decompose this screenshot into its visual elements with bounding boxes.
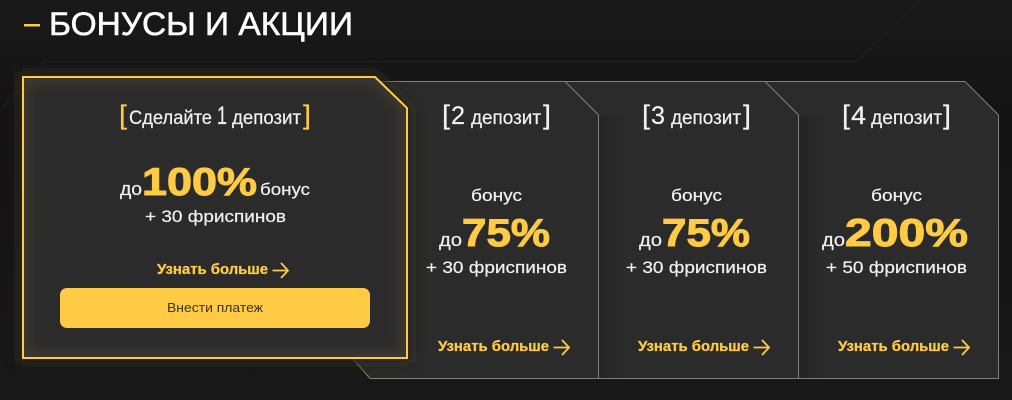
panel: 4th deposit [700, 82, 998, 378]
panel: 2nd deposit [353, 82, 598, 378]
title: БОНУСЫ И АКЦИИ [49, 6, 353, 42]
heading: 4 deposit: [ [842, 100, 851, 130]
bonus amount: 200%: бонус [871, 186, 923, 205]
heading: 2 deposit: 2 [451, 102, 465, 130]
heading: 3 deposit: ] [743, 100, 751, 130]
bonus amount: 75%: бонус [671, 186, 723, 205]
heading: make 1 deposit: ] [303, 100, 311, 130]
button: make payment: Внести платеж [167, 300, 263, 315]
heading: 3 deposit: [ [642, 100, 651, 130]
bonus amount: 75% [626, 186, 767, 277]
bonus amount: 200% [822, 186, 968, 277]
heading: 4 deposit: ] [943, 100, 951, 130]
link: learn more: Узнать больше [157, 261, 268, 278]
bonus amount: 100% [120, 161, 311, 226]
bonus amount: 75%: 75% [462, 212, 550, 255]
link: learn more: Узнать больше [438, 338, 549, 355]
bonus amount: 100%: + 30 фриспинов [145, 207, 286, 226]
heading: 2 deposit [442, 100, 551, 130]
link: learn more: Узнать больше [638, 338, 749, 355]
bonus amount: 75%: до [639, 230, 662, 250]
bonus amount: 75%: + 30 фриспинов [626, 258, 767, 277]
heading: make 1 deposit: депозит [232, 108, 301, 129]
bonus amount: 75%: 75% [662, 212, 750, 255]
heading: 4 deposit: 4 [851, 102, 866, 130]
heading: 4 deposit [842, 100, 951, 130]
heading: make 1 deposit: Сделайте [129, 108, 212, 129]
heading: 2 deposit: ] [543, 100, 551, 130]
bonus amount: 75% [426, 186, 567, 277]
heading: 3 deposit: 3 [651, 102, 665, 130]
heading: make 1 deposit [119, 100, 311, 130]
bonus amount: 200%: + 50 фриспинов [826, 258, 967, 277]
heading: 3 deposit: депозит [671, 108, 741, 129]
bonus amount: 100%: 100% [142, 161, 257, 204]
heading: 3 deposit [642, 100, 751, 130]
bonus amount: 200%: до [822, 230, 845, 250]
bonus amount: 75%: бонус [471, 186, 523, 205]
button: make payment [60, 288, 370, 328]
panel: 1st deposit (highlighted) [23, 77, 407, 358]
bonus amount: 75%: до [439, 230, 462, 250]
bonus amount: 75%: + 30 фриспинов [426, 258, 567, 277]
heading: 2 deposit: [ [442, 100, 451, 130]
bonus amount: 100%: бонус [260, 180, 311, 199]
heading: make 1 deposit: 1 [217, 102, 227, 130]
heading: make 1 deposit: [ [119, 100, 128, 130]
bonus amount: 200%: 200% [845, 212, 968, 255]
bonus amount: 100%: до [120, 179, 142, 199]
heading: 2 deposit: депозит [471, 108, 541, 129]
panel: 3rd deposit [500, 82, 798, 378]
heading: 4 deposit: депозит [871, 108, 942, 129]
link: learn more: Узнать больше [838, 338, 949, 355]
